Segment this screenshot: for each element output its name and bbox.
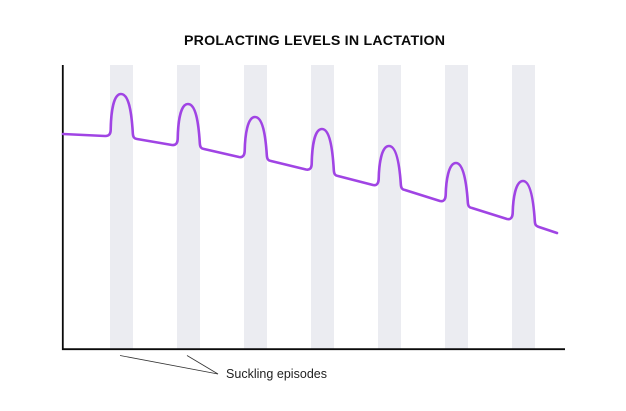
chart axes	[63, 65, 565, 349]
title: PROLACTING LEVELS IN LACTATION	[184, 33, 445, 49]
prolactin level curve	[63, 94, 557, 233]
leader lines to suckling episodes	[120, 356, 218, 374]
suckling episodes label: Suckling episodes	[226, 367, 327, 381]
suckling episode bands	[110, 65, 535, 349]
